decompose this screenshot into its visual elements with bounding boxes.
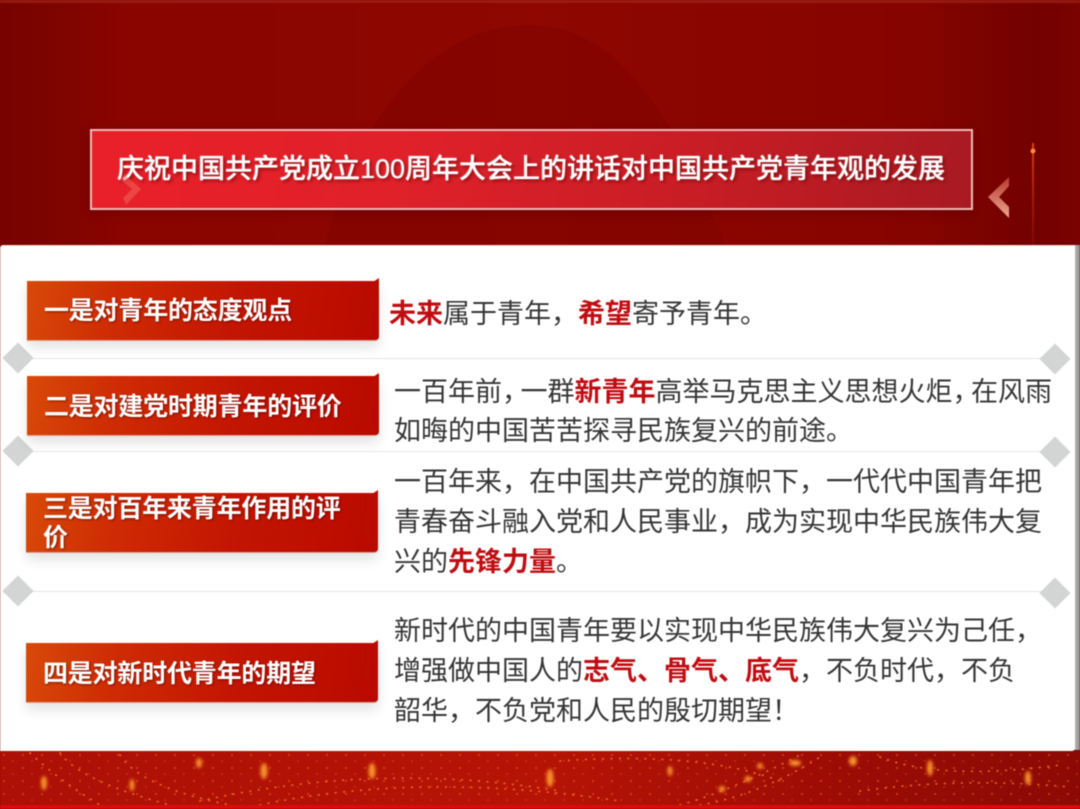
icon: left chevron — [121, 174, 141, 205]
text: row 3: 兴的先锋力量。 — [394, 547, 583, 577]
text: row 2: 一百年前，一群新青年高举马克思主义思想火炬，在风雨 — [394, 377, 1052, 407]
text: row 2 — [394, 376, 1052, 446]
text: row 3: 青春奋斗融入党和人民事业，成为实现中华民族伟大复 — [394, 507, 1042, 537]
text: row 3 — [394, 467, 1042, 577]
light beam — [1030, 142, 1036, 245]
text: row 4: 新时代的中国青年要以实现中华民族伟大复兴为己任， — [394, 616, 1042, 646]
text: row 4: 韶华，不负党和人民的殷切期望！ — [394, 696, 799, 726]
panel: white content — [0, 245, 1075, 751]
text: row 1: 未来属于青年，希望寄予青年。 — [389, 299, 767, 329]
text: row 3: 一百年来，在中国共产党的旗帜下，一代代中国青年把 — [394, 467, 1042, 497]
label: row 3 — [23, 490, 381, 563]
text: row 2: 如晦的中国苦苦探寻民族复兴的前途。 — [394, 416, 853, 446]
label: row 2 — [24, 372, 382, 446]
background arc — [0, 0, 1080, 244]
label: row 1 — [24, 278, 382, 351]
label: row 3: 价 — [43, 524, 68, 552]
text: row 4 — [394, 616, 1042, 726]
label: row 4: 四是对新时代青年的期望 — [43, 660, 316, 688]
label: row 4 — [23, 640, 381, 713]
label: row 2: 二是对建党时期青年的评价 — [44, 393, 342, 421]
row dividers — [30, 358, 1050, 359]
footer band with light dots — [0, 750, 1080, 809]
label: row 1: 一是对青年的态度观点 — [44, 297, 292, 325]
diamonds — [2, 342, 34, 374]
title banner — [90, 129, 973, 210]
right edge strip — [1074, 245, 1080, 750]
icon: right chevron — [988, 177, 1010, 218]
title text: 庆祝中国共产党成立100周年大会上的讲话对中国共产党青年观的发展 — [117, 154, 945, 184]
text: row 4: 增强做中国人的志气、骨气、底气，不负时代，不负 — [394, 656, 1015, 686]
label: row 3: 三是对百年来青年作用的评 — [43, 495, 341, 523]
